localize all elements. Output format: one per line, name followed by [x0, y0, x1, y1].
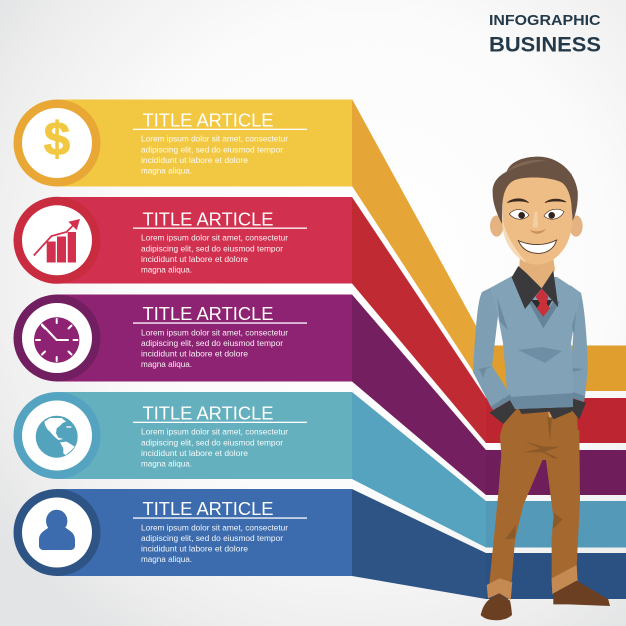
text block: magna aliqua.: [141, 458, 192, 468]
text block: Lorem ipsum dolor sit amet, consectetur: [141, 327, 288, 337]
hair: [493, 157, 578, 224]
character: businessman: [473, 157, 610, 620]
belly fold: [518, 347, 562, 363]
text block: [141, 327, 288, 369]
text block: Lorem ipsum dolor sit amet, consectetur: [141, 522, 288, 532]
text block: incididunt ut labore et dolore: [141, 543, 248, 553]
text block: adipiscing elit, sed do eiusmod tempor: [141, 533, 283, 543]
title: TITLE ARTICLE: [142, 403, 274, 423]
3D ribbon: purple: [352, 294, 626, 495]
panel: fourth article: [14, 392, 352, 479]
text block: incididunt ut labore et dolore: [141, 254, 248, 264]
3D ribbon: yellow: [352, 99, 626, 391]
torso: [490, 276, 581, 409]
text block: [141, 427, 288, 468]
heading: BUSINESS: [489, 34, 601, 57]
text block: adipiscing elit, sed do eiusmod tempor: [141, 144, 283, 154]
text block: [141, 522, 288, 564]
icon: clock: [34, 317, 79, 363]
text block: incididunt ut labore et dolore: [141, 448, 248, 458]
text block: adipiscing elit, sed do eiusmod tempor: [141, 338, 283, 348]
text block: [141, 134, 288, 175]
panel: second article: [14, 197, 352, 284]
icon: growth chart: [34, 219, 80, 262]
title: TITLE ARTICLE: [142, 304, 274, 324]
eyes: [509, 210, 529, 219]
title: TITLE ARTICLE: [142, 210, 274, 230]
text block: Lorem ipsum dolor sit amet, consectetur: [141, 233, 288, 243]
hem: [509, 393, 573, 409]
icon: globe: [36, 416, 78, 458]
text block: magna aliqua.: [141, 554, 192, 564]
right cuff band: [572, 392, 585, 402]
icon: person: [39, 510, 75, 550]
heading: [489, 12, 601, 57]
face: [503, 173, 572, 265]
head: [490, 157, 583, 265]
text block: Lorem ipsum dolor sit amet, consectetur: [141, 134, 288, 144]
neck: [519, 256, 555, 289]
panel: first article: [14, 100, 352, 186]
title: TITLE ARTICLE: [142, 111, 274, 131]
legs and shoes: [481, 430, 610, 620]
text block: magna aliqua.: [141, 165, 192, 175]
left sleeve: [473, 288, 510, 407]
text block: adipiscing elit, sed do eiusmod tempor: [141, 243, 283, 253]
ears: [490, 215, 583, 237]
text block: magna aliqua.: [141, 264, 192, 274]
smile: [518, 240, 557, 253]
panel: third article: [14, 294, 352, 382]
left cuff band: [491, 394, 512, 410]
text block: Lorem ipsum dolor sit amet, consectetur: [141, 427, 288, 437]
sweater: [473, 276, 588, 410]
sleeve folds: [478, 297, 584, 378]
3D ribbon: teal: [352, 392, 626, 548]
3D ribbon: red: [352, 197, 626, 443]
text block: incididunt ut labore et dolore: [141, 348, 248, 358]
nose: [533, 212, 538, 227]
title: TITLE ARTICLE: [142, 499, 274, 519]
3D ribbon: blue: [352, 489, 626, 599]
heading: INFOGRAPHIC: [489, 12, 601, 29]
text block: incididunt ut labore et dolore: [141, 155, 248, 165]
icon: dollar: $: [44, 112, 70, 165]
collar and tie: [512, 266, 560, 328]
right sleeve: [570, 285, 588, 397]
text block: adipiscing elit, sed do eiusmod tempor: [141, 437, 283, 447]
panel: fifth article: [14, 489, 352, 576]
pants top and shirt: [489, 399, 586, 460]
text block: [141, 233, 288, 274]
eyebrows: [507, 199, 566, 203]
text block: magna aliqua.: [141, 359, 192, 369]
